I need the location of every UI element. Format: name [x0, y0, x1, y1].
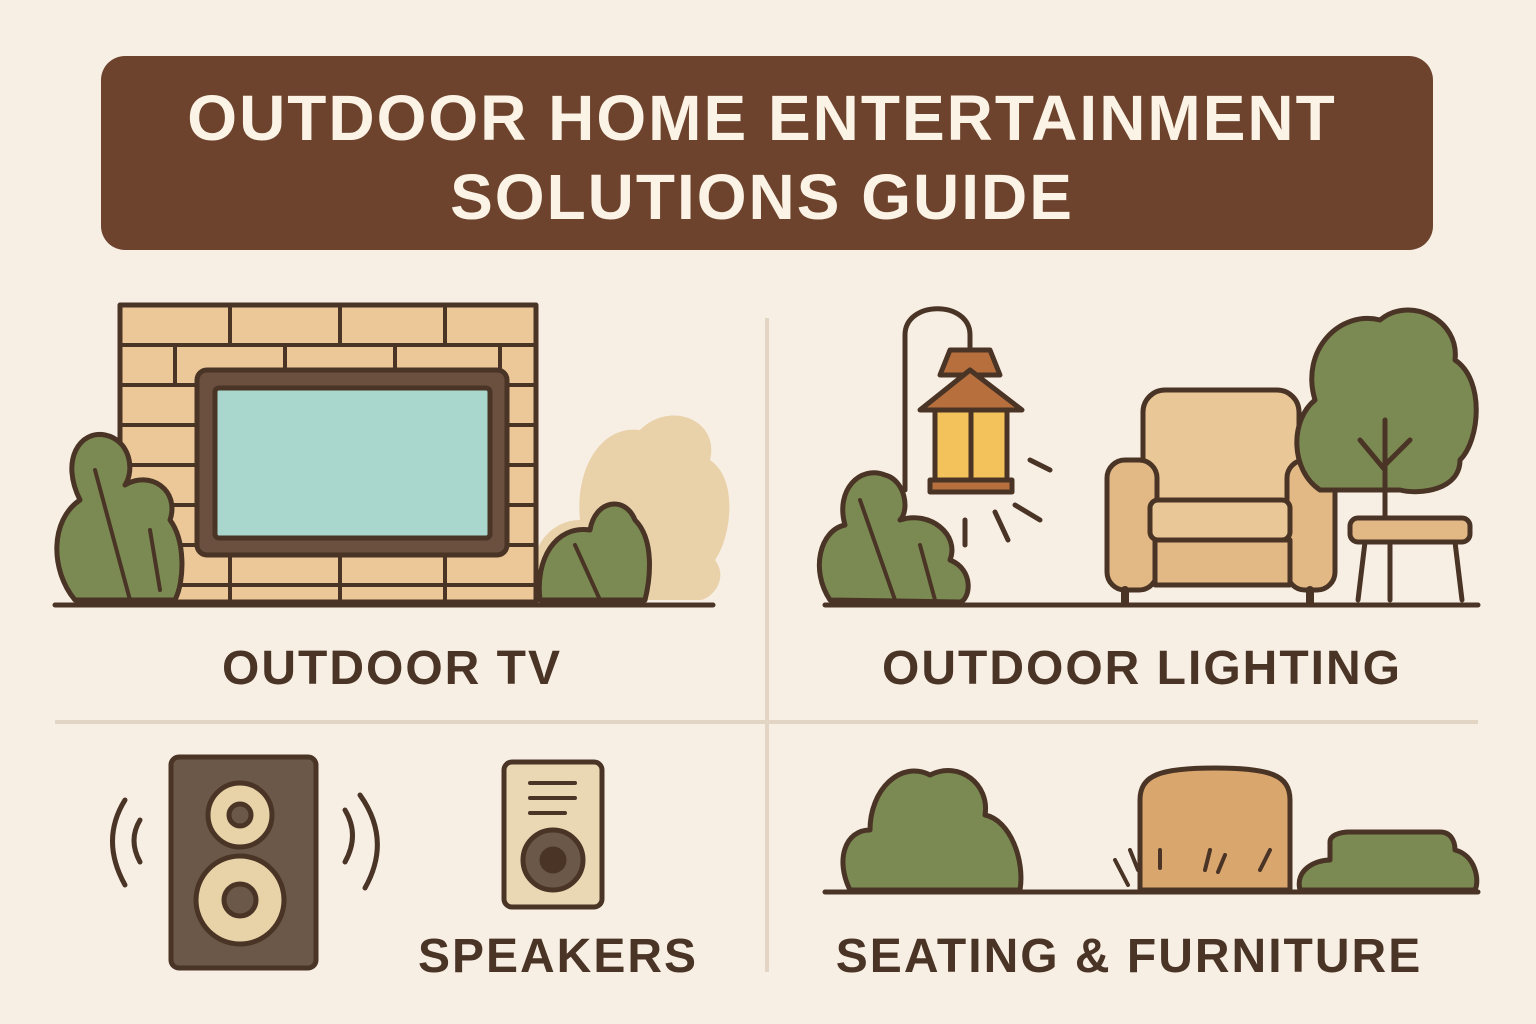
icon: brick wall	[120, 305, 536, 602]
title banner: SOLUTIONS GUIDE	[450, 161, 1074, 233]
icon: grass strokes	[1115, 850, 1270, 885]
icon: armchair	[1107, 390, 1335, 602]
icon: small speaker	[504, 762, 602, 907]
panel: seating & furniture	[825, 768, 1478, 892]
icon: big speaker	[171, 757, 316, 968]
icon: tv	[197, 370, 507, 555]
icon: ottoman	[1140, 768, 1290, 890]
title banner	[101, 56, 1433, 250]
icon: lantern	[920, 350, 1022, 492]
icon: sound waves	[112, 795, 377, 888]
icon: tree	[1297, 310, 1476, 520]
icon: green bush left	[57, 434, 182, 600]
title banner: OUTDOOR HOME ENTERTAINMENT	[187, 82, 1337, 154]
label: outdoor tv: OUTDOOR TV	[222, 642, 562, 695]
panel: outdoor lighting	[819, 309, 1478, 605]
label: outdoor lighting: OUTDOOR LIGHTING	[882, 642, 1402, 695]
icon: bush	[819, 473, 968, 602]
panel: speakers	[112, 757, 602, 968]
icon: hedge	[1299, 832, 1477, 890]
label: seating & furniture: SEATING & FURNITURE	[836, 930, 1422, 983]
icon: lamp post	[905, 309, 970, 490]
icon: green bush right	[539, 504, 649, 600]
icon: stool	[1350, 518, 1470, 600]
icon: light rays	[965, 460, 1050, 545]
icon: bush	[843, 771, 1021, 890]
panel: outdoor tv	[55, 305, 729, 605]
icon: beige bush	[533, 416, 729, 600]
label: speakers: SPEAKERS	[418, 930, 698, 983]
